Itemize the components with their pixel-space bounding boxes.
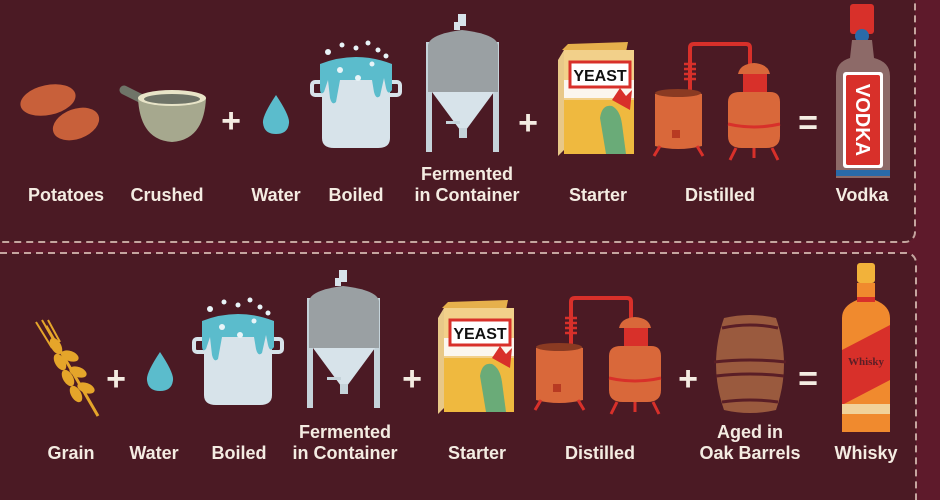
plus: + [678, 360, 698, 398]
labels: vodka row: Vodka [836, 185, 889, 205]
icon: vodka bottle [836, 4, 890, 178]
plus: + [402, 360, 422, 398]
icon: fermenter [426, 14, 499, 152]
icon: water drop [147, 352, 173, 391]
labels: whisky row: Grain [47, 443, 95, 463]
labels: vodka row: Potatoes [28, 185, 104, 205]
plus: + [106, 360, 126, 398]
labels: vodka row: Fermented [421, 164, 513, 184]
icon: grain [36, 320, 98, 416]
labels: whisky row: Starter [448, 443, 506, 463]
icon: yeast [438, 300, 514, 414]
icon: whisky bottle [842, 263, 890, 432]
icon: water drop [263, 95, 289, 134]
labels: whisky row: Fermented [299, 422, 391, 442]
icon: fermenter [307, 270, 380, 408]
labels: whisky row: Water [129, 443, 179, 463]
panel: whisky [0, 253, 916, 500]
labels: whisky row: Boiled [211, 443, 267, 463]
icon: still [535, 298, 661, 414]
panel: vodka [0, 0, 915, 242]
plus: + [221, 102, 241, 140]
labels: whisky row [47, 422, 898, 463]
labels: whisky row: Distilled [565, 443, 635, 463]
icon: still [654, 44, 780, 160]
icon: whisky bottle: Whisky [848, 356, 885, 368]
labels: whisky row: Oak Barrels [699, 443, 801, 463]
icon: potatoes [17, 80, 104, 146]
icon: vodka bottle: VODKA [851, 84, 873, 156]
labels: vodka row: in Container [414, 185, 520, 205]
labels: vodka row: Crushed [130, 185, 204, 205]
icon: boiled pot [312, 40, 400, 148]
icon: mortar [124, 90, 206, 142]
icon: yeast [558, 42, 634, 156]
plus: + [518, 104, 538, 142]
icon: boiled pot [194, 298, 282, 405]
equals: = [798, 104, 818, 142]
labels: vodka row [28, 164, 889, 205]
labels: whisky row: in Container [292, 443, 398, 463]
labels: vodka row: Distilled [685, 185, 755, 205]
icon: barrel [714, 315, 786, 413]
labels: whisky row: Whisky [834, 443, 898, 463]
equals: = [798, 360, 818, 398]
labels: vodka row: Boiled [328, 185, 384, 205]
labels: vodka row: Starter [569, 185, 627, 205]
labels: whisky row: Aged in [717, 422, 783, 442]
labels: vodka row: Water [251, 185, 301, 205]
